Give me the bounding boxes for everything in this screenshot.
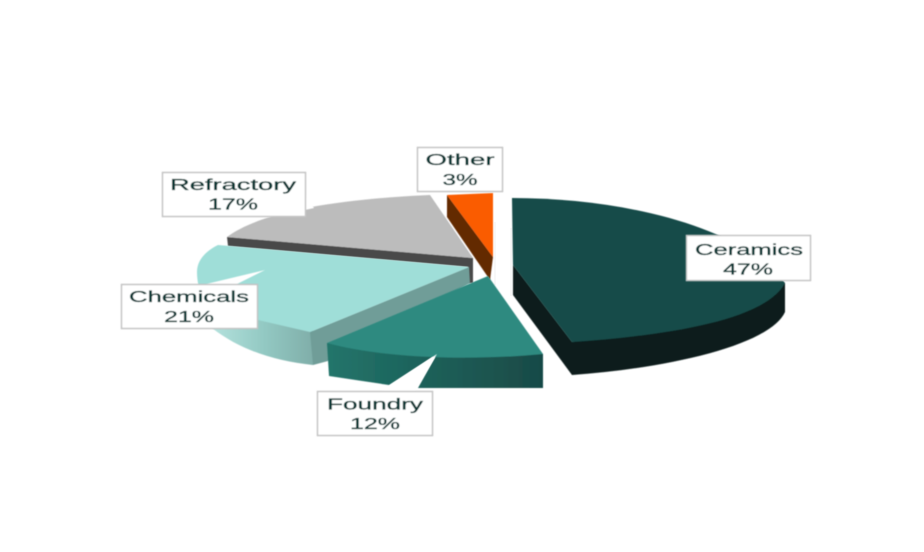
callout: Refractory 17%: Refractory [170,177,296,194]
callout: Other 3% [418,148,502,192]
callout: Foundry 12%: Foundry [327,396,423,414]
callout: Other 3%: 3% [442,172,478,189]
callout: Foundry 12% [318,354,437,436]
slice: Other 3% [447,193,493,280]
slice: Chemicals 21% [197,245,470,365]
callout: Foundry 12%: 12% [350,416,400,433]
callout: Chemicals 21% [122,270,265,328]
slice: Ceramics 47% [512,198,785,375]
callout: Chemicals 21%: Chemicals [129,289,249,306]
slice: Foundry 12% [327,276,543,388]
callout: Ceramics 47% [686,236,810,280]
callout: Chemicals 21%: 21% [164,309,214,326]
slice: Refractory 17% [227,195,473,283]
callout: Other 3%: Other [426,152,496,169]
callout: Refractory 17%: 17% [208,196,258,214]
callout: Refractory 17% [162,172,314,216]
callout: Ceramics 47%: Ceramics [695,242,803,259]
callout: Ceramics 47%: 47% [723,262,773,278]
